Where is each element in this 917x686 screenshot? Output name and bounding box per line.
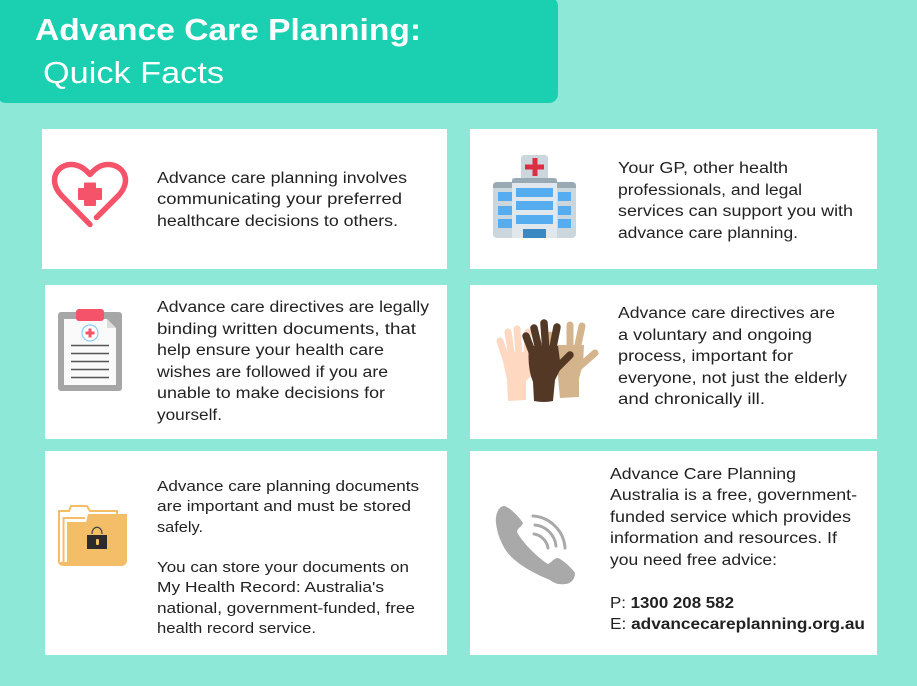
- text block: unable to make decisions for: [157, 385, 385, 402]
- icon: raised hands: [500, 323, 595, 402]
- text block: Advance care planning involves: [157, 170, 407, 187]
- title banner: [0, 0, 558, 103]
- panel: advance care directives: [45, 285, 447, 439]
- text block: are important and must be stored: [157, 499, 411, 515]
- text block: yourself.: [157, 407, 222, 424]
- text block: funded service which provides: [610, 509, 851, 526]
- text block: national, government-funded, free: [157, 601, 415, 617]
- text block: process, important for: [618, 348, 793, 365]
- text block: You can store your documents on: [157, 560, 409, 576]
- text block: [618, 160, 853, 242]
- panel: storing documents: [45, 451, 447, 655]
- text block: advance care planning.: [618, 225, 798, 242]
- panel: voluntary process: [470, 285, 877, 439]
- text block: Advance care planning documents: [157, 479, 419, 495]
- text block: help ensure your health care: [157, 342, 384, 359]
- subtitle: Quick Facts: [43, 55, 224, 90]
- text block: [156, 299, 429, 424]
- text block: you need free advice:: [610, 552, 777, 569]
- text block: a voluntary and ongoing: [618, 327, 812, 344]
- icon: folder with padlock: [58, 506, 127, 566]
- text block: Advance Care Planning: [610, 466, 796, 483]
- text block: [610, 466, 857, 569]
- contact details: E: advancecareplanning.org.au: [610, 616, 865, 633]
- text block: binding written documents, that: [157, 321, 417, 338]
- text block: everyone, not just the elderly: [618, 370, 847, 387]
- text block: communicating your preferred: [157, 191, 402, 208]
- text block: information and resources. If: [610, 530, 838, 547]
- text block: health record service.: [157, 621, 316, 637]
- text block: [618, 305, 847, 408]
- text block: [157, 170, 407, 230]
- text block: Australia is a free, government-: [610, 487, 857, 504]
- icon: clipboard: [58, 309, 122, 391]
- text block: services can support you with: [618, 203, 853, 220]
- text block: wishes are followed if you are: [156, 364, 388, 381]
- text block: Your GP, other health: [618, 160, 788, 177]
- text block: Advance care directives are legally: [157, 299, 429, 316]
- panel: contact service: [470, 451, 877, 655]
- text block: safely.: [157, 520, 203, 536]
- text block: Advance care directives are: [618, 305, 835, 322]
- title: Advance Care Planning:: [35, 12, 421, 47]
- text block: healthcare decisions to others.: [157, 213, 398, 230]
- text block: My Health Record: Australia's: [157, 580, 384, 596]
- icon: hospital: [493, 155, 576, 238]
- contact details: P: 1300 208 582: [610, 595, 734, 612]
- contact details: [610, 595, 865, 633]
- text block: [157, 479, 419, 637]
- panel: who can support: [470, 129, 877, 269]
- text block: professionals, and legal: [618, 182, 802, 199]
- text block: and chronically ill.: [618, 391, 765, 408]
- panel: communicating decisions: [42, 129, 447, 269]
- icon: phone: [496, 506, 575, 584]
- icon: heart with cross: [55, 164, 125, 224]
